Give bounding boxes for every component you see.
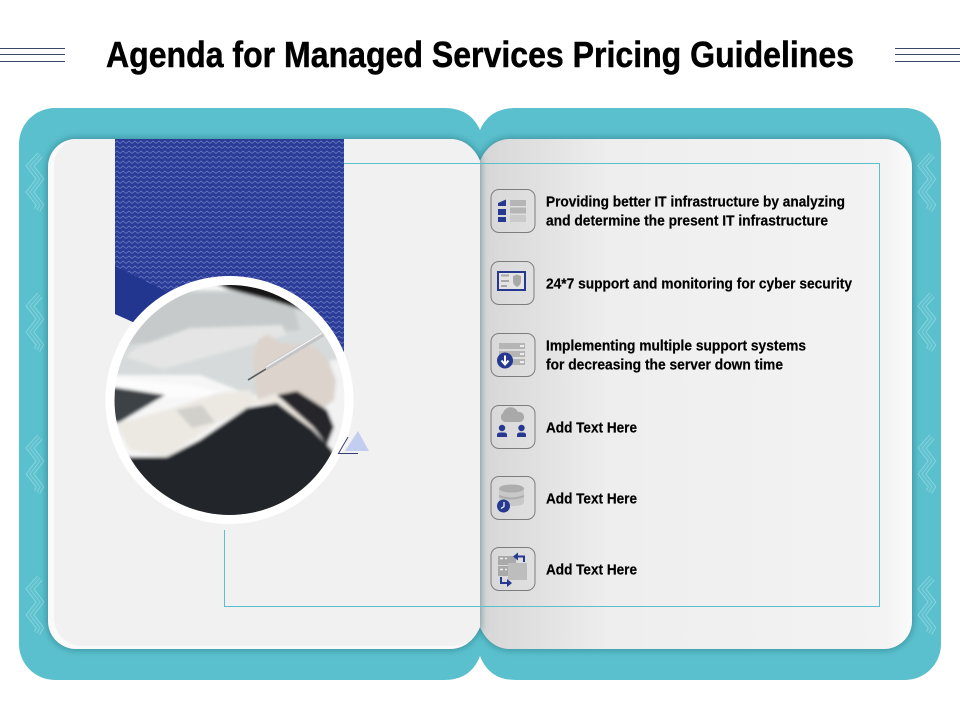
text: item 3 — [546, 338, 806, 374]
left header decoration — [0, 48, 65, 62]
agenda item 3 — [491, 334, 806, 376]
text: item 2: 24*7 support and monitoring for cyber security — [546, 276, 853, 292]
photo circle — [105, 275, 355, 530]
icon: transfer arrows — [491, 548, 535, 590]
right page — [480, 139, 912, 649]
solid blue ribbon corner — [115, 266, 175, 322]
title: Agenda for Managed Services Pricing Guidelines — [106, 34, 854, 75]
icon: server list — [491, 190, 535, 232]
icon: cloud and users — [491, 406, 535, 448]
text: item 6: Add Text Here — [546, 562, 637, 578]
patterned blue ribbon — [115, 139, 344, 352]
left page — [48, 139, 480, 649]
text: item 1: and determine the present IT infrastructure — [546, 212, 828, 230]
text: item 3: Implementing multiple support systems — [546, 338, 806, 354]
agenda item 5 — [491, 476, 637, 520]
triangle accents — [338, 431, 369, 454]
text: item 1 — [546, 194, 845, 230]
icon: database clock — [491, 476, 535, 520]
agenda item 6 — [491, 548, 637, 590]
text: item 3: for decreasing the server down time — [546, 356, 783, 374]
thin teal frame — [224, 164, 880, 606]
text: item 4: Add Text Here — [546, 420, 637, 436]
icon: server download — [491, 334, 535, 376]
zigzag decorations, left edge — [30, 155, 40, 633]
zigzag decorations, right edge — [922, 155, 932, 633]
teal book cover — [19, 108, 941, 680]
agenda item 1 — [491, 190, 845, 232]
icon: security monitor — [491, 262, 534, 304]
agenda item 2 — [491, 262, 853, 304]
text: item 1: Providing better IT infrastructure by analyzing — [546, 194, 845, 210]
text: item 5: Add Text Here — [546, 490, 637, 508]
right header decoration — [895, 48, 960, 62]
agenda item 4 — [491, 406, 637, 448]
